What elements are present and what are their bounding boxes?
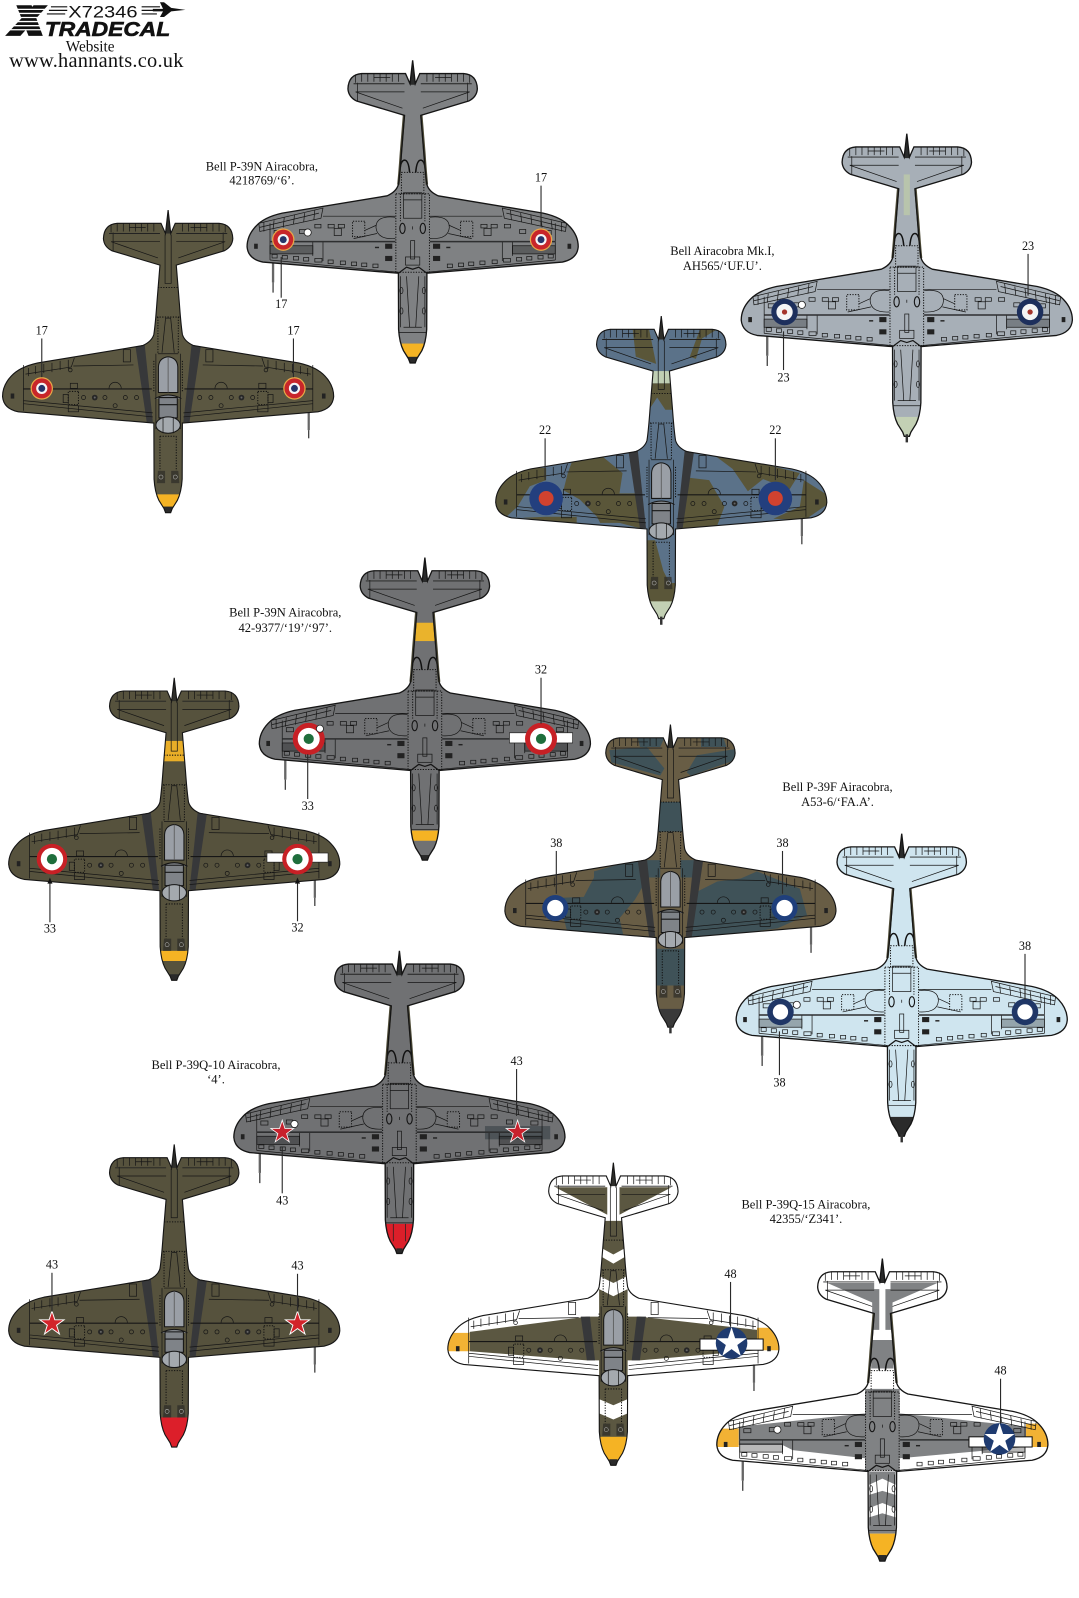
callout 23 left: [777, 331, 790, 384]
US star insignia: [984, 1423, 1015, 1455]
caption: P-39Q-15: Bell P-39Q-15 Airacobra,: [741, 1198, 870, 1212]
callout 17 right: 17: [535, 171, 547, 185]
caption: P-39N 4218769: Bell P-39N Airacobra,: [206, 159, 318, 173]
callout 22 left: 22: [539, 423, 551, 437]
caption: P-39N 42-9377: [229, 606, 341, 635]
callout 32: 32: [535, 663, 547, 677]
callout 48: 48: [724, 1267, 737, 1281]
plane: Airacobra Mk.I upper camouflage: [488, 316, 834, 625]
website url: www.hannants.co.uk: [9, 50, 184, 72]
roundel right: [530, 228, 552, 251]
product code: X72346: [68, 3, 138, 22]
callout 48: [994, 1364, 1007, 1424]
callout 22 right: 22: [769, 423, 781, 437]
callout 38 left: 38: [773, 1075, 786, 1089]
caption: P-39Q-15: [741, 1198, 870, 1226]
bar: [700, 1339, 763, 1350]
callout 22 right: [769, 423, 781, 480]
callout 43 right: [291, 1259, 304, 1311]
callout 38 left: [773, 1031, 786, 1089]
caption: P-39F A53-6: [782, 780, 893, 809]
callout 38 left: 38: [550, 836, 562, 850]
website label: Website: [66, 39, 115, 56]
roundel right: [772, 895, 798, 921]
plane: Airacobra Mk.I underside: [741, 134, 1072, 442]
roundel right: [1012, 999, 1038, 1025]
white bar: [509, 733, 573, 743]
roundel left: [771, 299, 798, 325]
plane: P-39N underside grey: [247, 60, 578, 364]
caption: P-39N 42-9377: 42-9377/‘19’/‘97’.: [239, 621, 332, 635]
olive band and fuselage chevrons: [470, 1187, 757, 1438]
callout 23 right: [1022, 239, 1034, 296]
speed lines: [47, 7, 160, 14]
plane: P-39Q-15 underside white wings: [709, 1259, 1056, 1562]
caption: P-39Q-10: ‘4’.: [207, 1072, 225, 1086]
callout 32: [535, 663, 547, 724]
camouflage: dark green-blue patches: [558, 738, 807, 985]
callout 43 left: [46, 1258, 58, 1311]
roundel left: [542, 895, 568, 921]
grey band and fuselage chevrons: [739, 1283, 1026, 1534]
callout 17 right: 17: [287, 323, 300, 337]
callout 48: 48: [994, 1364, 1007, 1378]
callout 38 right: [1019, 939, 1031, 1000]
caption: P-39Q-15: 42355/‘Z341’.: [770, 1212, 842, 1226]
anti-glare panels: [581, 1317, 646, 1360]
bar: [969, 1437, 1032, 1447]
callout 33: 33: [44, 921, 56, 935]
white bar: [267, 853, 328, 862]
star right: [284, 1309, 311, 1335]
callout 43 left: 43: [46, 1258, 58, 1272]
callout 33: [302, 754, 314, 813]
callout 33: [44, 877, 56, 935]
caption: Mk.I AH565: AH565/‘UF.U’.: [683, 259, 762, 273]
callout 17 left: [36, 323, 48, 377]
plane: P-39N upper olive: [3, 210, 334, 514]
plane: P-39Q-10 upper with red nose: [9, 1144, 340, 1448]
plane: P-39Q-15 upper white wings: [440, 1163, 787, 1466]
roundel right: [525, 723, 557, 755]
star right: [505, 1119, 530, 1143]
roundel left: [37, 844, 67, 874]
callout 43 right: [510, 1054, 523, 1116]
caption: P-39N 4218769: [206, 159, 318, 188]
US star insignia: [716, 1327, 747, 1359]
caption: P-39F A53-6: Bell P-39F Airacobra,: [782, 780, 893, 794]
logo: Xtradecal header: [3, 2, 185, 72]
callout 23 left: 23: [777, 370, 790, 384]
callout 17 left: [275, 257, 287, 311]
caption: Mk.I AH565: [670, 244, 775, 273]
callout 38 right: 38: [776, 836, 789, 850]
callout 38 right: [776, 836, 789, 894]
callout 43 left: 43: [276, 1194, 288, 1208]
plane: P-39Q-10 underside with red nose: [234, 951, 565, 1254]
callout 43 right: 43: [510, 1054, 523, 1068]
caption: P-39N 42-9377: Bell P-39N Airacobra,: [229, 606, 341, 620]
roundel right: [759, 482, 792, 515]
callout 23 right: 23: [1022, 239, 1034, 253]
caption: P-39F A53-6: A53-6/‘FA.A’.: [801, 795, 874, 809]
plane: P-39N underside with yellow band: [259, 558, 590, 861]
plane: P-39N upper with yellow band: [9, 678, 340, 981]
yellow wingtips: [440, 1328, 787, 1351]
roundel left: [293, 723, 325, 755]
yellow wingtips: [709, 1424, 1056, 1447]
caption: Mk.I AH565: Bell Airacobra Mk.I,: [670, 244, 775, 258]
callout 38 right: 38: [1019, 939, 1031, 953]
callout 32: 32: [291, 920, 304, 934]
callout 17 left: 17: [36, 323, 48, 337]
roundel right: [1017, 299, 1043, 325]
roundel left: [767, 999, 794, 1025]
callout 33: 33: [302, 799, 314, 813]
roundel left: [272, 228, 294, 251]
callout 48: [724, 1267, 737, 1327]
callout 22 left: [539, 423, 551, 480]
star left: [38, 1309, 66, 1335]
caption: P-39N 4218769: 4218769/‘6’.: [229, 174, 294, 188]
camouflage: olive patches: [488, 329, 834, 603]
callout 38 left: [550, 836, 562, 894]
callout 43 left: [276, 1146, 288, 1208]
callout 43 right: 43: [291, 1259, 304, 1273]
caption: P-39Q-10: [152, 1058, 280, 1086]
callout 32: [291, 877, 304, 934]
callout 17 right: [535, 171, 547, 226]
icon: jet: [153, 2, 185, 17]
roundel left: [529, 482, 563, 515]
icon: striped X: [3, 5, 51, 36]
plane: P-39F underside pale blue: [736, 834, 1067, 1142]
wordmark: TRADECAL: [45, 19, 170, 41]
caption: P-39Q-10: Bell P-39Q-10 Airacobra,: [152, 1058, 280, 1072]
roundel left: [31, 377, 53, 400]
roundel right: [283, 377, 306, 400]
callout 17 right: [287, 323, 300, 377]
plane: P-39F upper camouflage: [505, 725, 836, 1033]
roundel right: [282, 844, 313, 874]
star left: [270, 1119, 295, 1143]
callout 17 left: 17: [275, 297, 287, 311]
